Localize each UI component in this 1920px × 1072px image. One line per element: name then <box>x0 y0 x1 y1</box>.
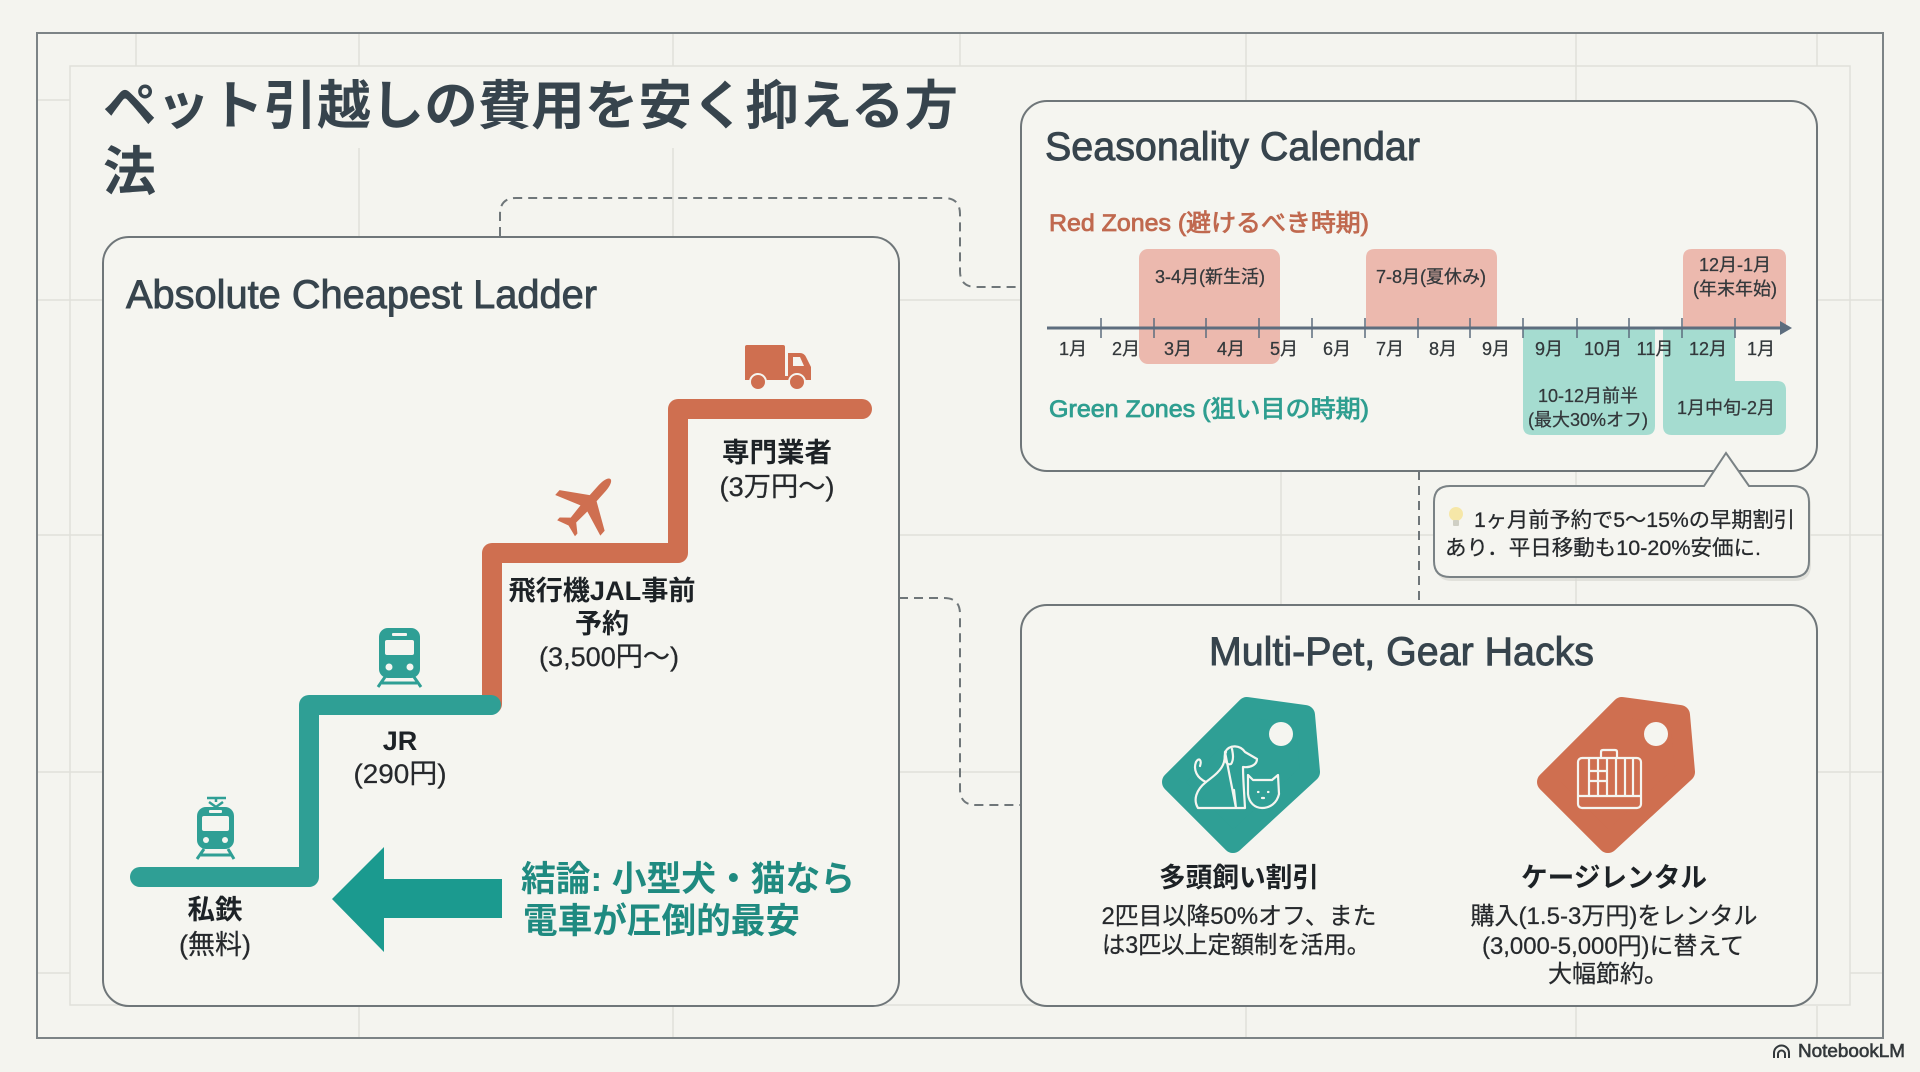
month labels <box>1059 339 1775 359</box>
label: airplane JAL: 飛行機JAL事前 <box>508 576 696 606</box>
label: private railway: (無料) <box>179 930 251 960</box>
description: cage rental: (3,000-5,000円)に替えて <box>1482 933 1744 960</box>
month labels: 9月 <box>1535 339 1563 359</box>
green zones label: Green Zones (狙い目の時期) <box>1049 396 1369 423</box>
month labels: 8月 <box>1429 339 1457 359</box>
label: JR <box>354 726 446 789</box>
heading: ladder: Absolute Cheapest Ladder <box>126 273 597 317</box>
heading: hacks: Multi-Pet, Gear Hacks <box>1209 630 1594 674</box>
green zone: autumn: 10-12月前半 <box>1538 386 1638 406</box>
month labels: 1月 <box>1059 339 1087 359</box>
icon: airplane <box>544 459 633 549</box>
panel: Absolute Cheapest Ladder <box>103 237 899 1006</box>
label: airplane JAL: (3,500円〜) <box>539 642 679 672</box>
icon: private railway tram <box>197 798 234 859</box>
icon: orange tag with carrier <box>1547 707 1685 843</box>
tip text <box>1445 509 1795 560</box>
month labels: 3月 <box>1164 339 1192 359</box>
panel: Multi-Pet, Gear Hacks <box>1021 605 1817 1006</box>
label: airplane JAL <box>508 576 696 672</box>
icon: light bulb <box>1449 507 1463 526</box>
label: specialist movers <box>720 438 834 502</box>
label: airplane JAL: 予約 <box>575 609 629 639</box>
description: cage rental: 購入(1.5-3万円)をレンタル <box>1470 903 1758 930</box>
conclusion text: 結論: 小型犬・猫なら <box>521 860 855 899</box>
month labels: 11月 <box>1637 339 1673 359</box>
icon: truck <box>745 345 811 390</box>
red zone: spring: 3-4月(新生活) <box>1155 267 1265 287</box>
red zone: summer: 7-8月(夏休み) <box>1376 267 1486 287</box>
month labels: 6月 <box>1323 339 1351 359</box>
callout: early booking tip <box>1434 453 1811 581</box>
NotebookLM watermark: NotebookLM <box>1798 1041 1905 1061</box>
label: specialist movers: (3万円〜) <box>720 472 834 502</box>
heading: calendar: Seasonality Calendar <box>1045 125 1420 169</box>
green zone: winter: 1月中旬-2月 <box>1677 398 1775 418</box>
label: cage rental: ケージレンタル <box>1521 863 1707 893</box>
description: multi-pet discount <box>1102 903 1376 959</box>
month labels: 10月 <box>1584 339 1622 359</box>
description: multi-pet discount: 2匹目以降50%オフ、また <box>1102 903 1376 930</box>
label: JR: JR <box>383 726 417 756</box>
icon: JR train <box>378 628 421 687</box>
card: cage rental <box>1470 707 1758 988</box>
red zones label: Red Zones (避けるべき時期) <box>1049 210 1369 237</box>
card: multi-pet discount <box>1102 707 1376 959</box>
description: cage rental <box>1470 903 1758 988</box>
label: multi-pet discount: 多頭飼い割引 <box>1159 863 1319 893</box>
month labels: 7月 <box>1376 339 1404 359</box>
month labels: 2月 <box>1112 339 1140 359</box>
month labels: 5月 <box>1270 339 1298 359</box>
tip text: あり．平日移動も10-20%安価に. <box>1445 537 1761 560</box>
label: specialist movers: 専門業者 <box>722 438 832 468</box>
label: JR: (290円) <box>354 759 446 789</box>
month labels: 9月 <box>1482 339 1510 359</box>
icon: teal tag with dog and cat <box>1172 707 1310 843</box>
description: cage rental: 大幅節約。 <box>1548 961 1668 988</box>
title <box>103 77 958 202</box>
panel: Seasonality Calendar <box>1021 101 1817 471</box>
green zone: autumn: (最大30%オフ) <box>1528 410 1648 430</box>
description: multi-pet discount: は3匹以上定額制を活用。 <box>1102 932 1370 959</box>
label: private railway: 私鉄 <box>188 895 242 925</box>
red zone: new year: (年末年始) <box>1693 279 1777 299</box>
month labels: 4月 <box>1217 339 1245 359</box>
label: private railway <box>179 895 251 960</box>
red zone: new year: 12月-1月 <box>1699 255 1771 275</box>
arrow: conclusion <box>332 847 502 952</box>
red zone: summer <box>1366 249 1497 328</box>
timeline axis <box>1047 318 1792 338</box>
staircase line <box>140 409 862 877</box>
red zone: spring <box>1139 249 1280 364</box>
title: 法 <box>103 143 156 202</box>
title: ペット引越しの費用を安く抑える方 <box>103 77 958 136</box>
red zone: new year <box>1683 249 1786 328</box>
green zone: autumn <box>1523 328 1655 435</box>
tip text: 1ヶ月前予約で5〜15%の早期割引 <box>1474 509 1795 532</box>
conclusion text: 電車が圧倒的最安 <box>523 902 800 941</box>
conclusion text <box>521 860 855 941</box>
green zone: winter <box>1663 328 1786 435</box>
month labels: 12月 <box>1689 339 1727 359</box>
month labels: 1月 <box>1747 339 1775 359</box>
